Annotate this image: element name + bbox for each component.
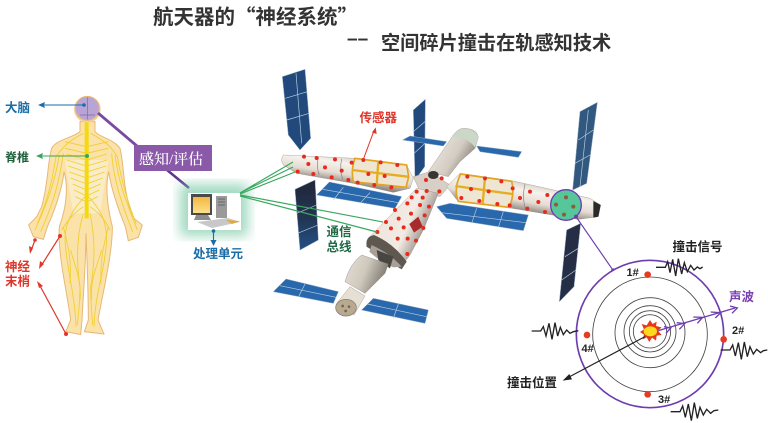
human nervous system figure (29, 96, 142, 335)
label: sensor 1: 1# (626, 267, 639, 279)
subtitle: –– (347, 29, 368, 50)
label: communication bus: 总线 (326, 239, 352, 254)
label: sensors: 传感器 (360, 110, 398, 125)
brain highlight (75, 96, 99, 120)
nerves (35, 133, 137, 327)
label: nerve endings (5, 259, 31, 288)
spine (81, 120, 93, 218)
panel ribs (280, 73, 593, 318)
label: sensor 4: 4# (582, 343, 594, 355)
solar panels (273, 69, 597, 323)
sensor dots (584, 271, 727, 398)
label: brain: 大脑 (5, 100, 30, 115)
magnified sensor area (551, 190, 581, 220)
impact detail diagram (532, 215, 767, 421)
capsule (345, 255, 388, 293)
right arm module (447, 173, 601, 219)
label: impact location: 撞击位置 (507, 375, 557, 390)
label: nerve endings: 末梢 (5, 274, 31, 288)
communication bus lines (240, 162, 383, 232)
head (74, 96, 101, 123)
white panel (188, 193, 241, 230)
impact burst (640, 320, 662, 342)
sensors (296, 155, 549, 256)
label: spine: 脊椎 (5, 150, 29, 164)
processing unit (180, 184, 248, 236)
body silhouette (29, 122, 142, 335)
arrow: spine (36, 153, 89, 159)
lower arm module (367, 188, 438, 268)
sound wave arrow (658, 306, 737, 333)
label: processing unit: 处理单元 (193, 246, 244, 261)
connector: brain to perception box (98, 113, 137, 146)
box: perception and evaluation: 感知/评估 (139, 150, 203, 168)
label: sensor 3: 3# (658, 394, 670, 406)
outer ring (576, 260, 724, 408)
space station (273, 69, 601, 323)
connector line (574, 215, 616, 273)
arrow: processing unit (210, 229, 216, 246)
box: perception and evaluation (134, 145, 212, 171)
impact location arrow (563, 337, 645, 381)
top module (428, 128, 478, 177)
arrow: brain (38, 102, 86, 108)
arrow: sensor label (363, 127, 377, 159)
label: sensor 2: 2# (732, 325, 744, 337)
connector: perception box to computer (167, 170, 189, 188)
title: 航天器的“神经系统” (153, 0, 358, 30)
left arm module (282, 155, 413, 192)
label: communication bus: 通信 (326, 224, 352, 239)
signal waveforms (532, 259, 767, 421)
label: impact signal: 撞击信号 (672, 239, 723, 254)
subtitle: 空间碎片撞击在轨感知技术 (381, 28, 611, 56)
keyboard (197, 218, 240, 228)
monitor (191, 194, 212, 215)
concentric wave rings (593, 277, 707, 392)
hub (413, 172, 450, 197)
back muscle area (65, 160, 108, 213)
tower (216, 196, 227, 218)
arrows: nerve endings (29, 234, 68, 336)
label: sound wave: 声波 (729, 289, 755, 304)
label: communication bus (326, 224, 352, 254)
label: nerve endings: 神经 (5, 259, 31, 274)
glow (180, 184, 248, 236)
